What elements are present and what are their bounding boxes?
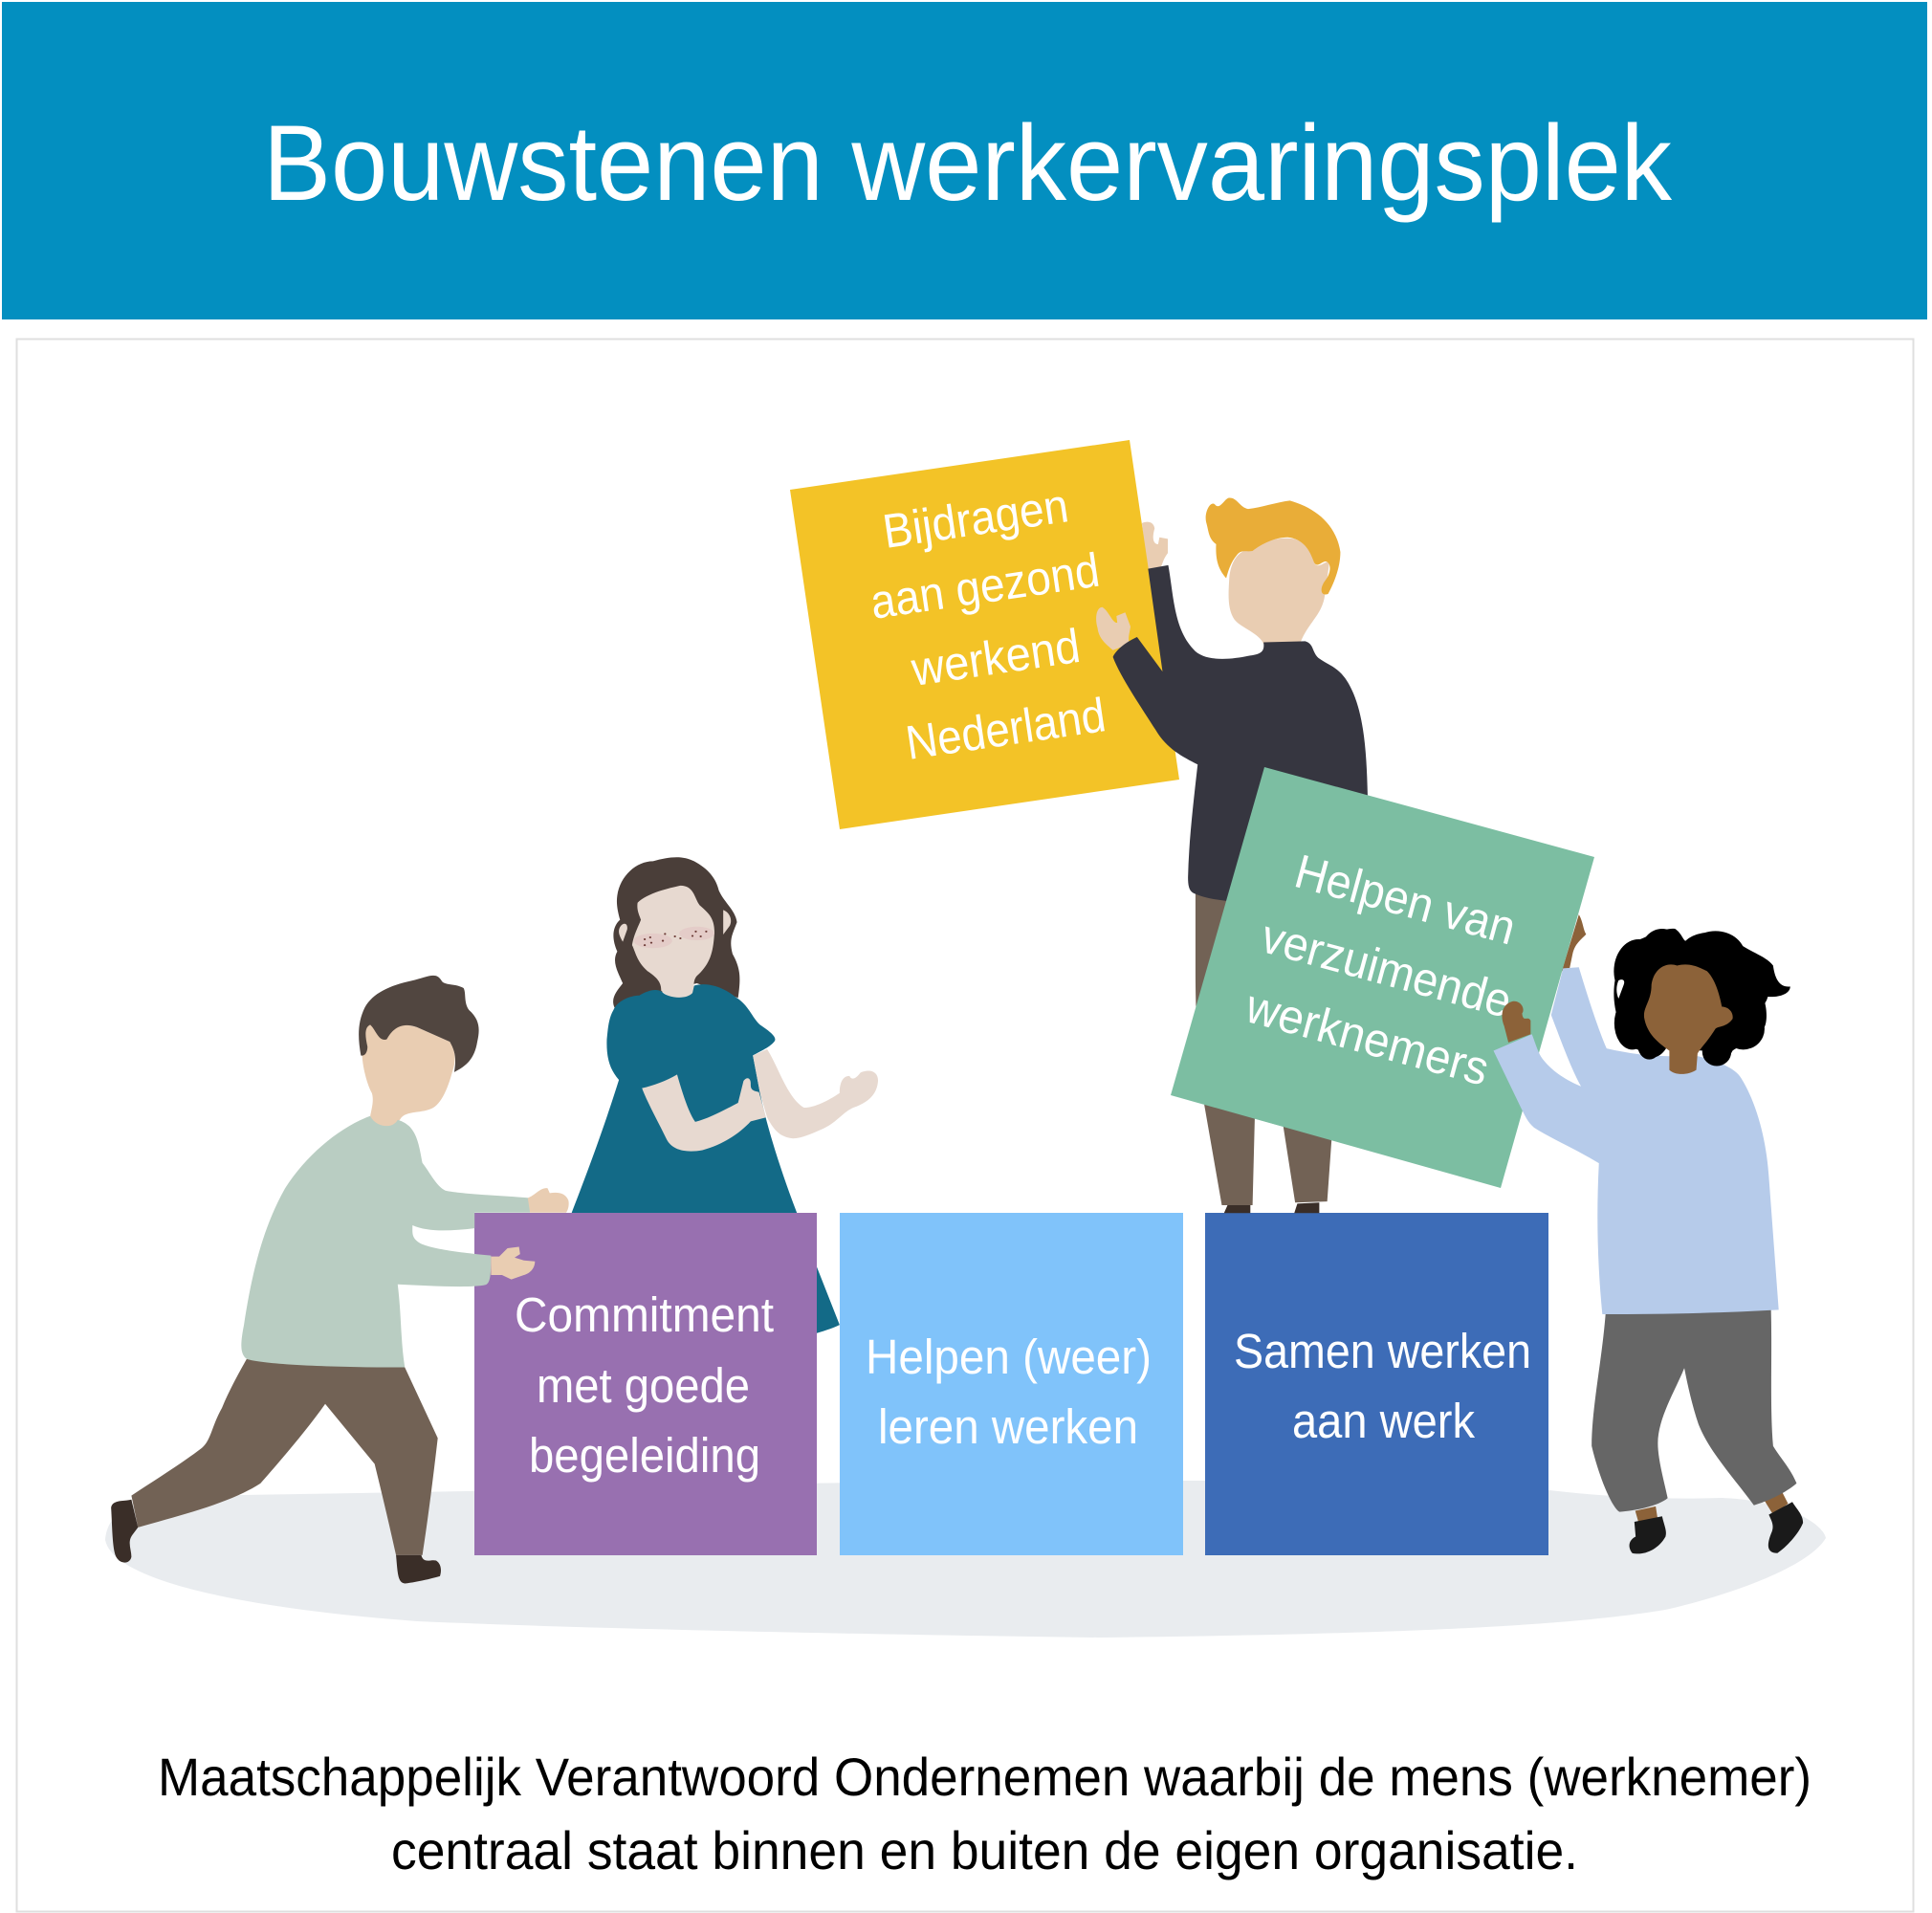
building block: dark blue: Samen werken [1234, 1324, 1531, 1378]
figure: man pushing block [111, 976, 569, 1584]
building block: purple: met goede [537, 1358, 750, 1413]
building block: dark blue [1205, 1213, 1548, 1555]
sign: green [1171, 767, 1594, 1188]
sign: yellow: Nederland [903, 688, 1109, 770]
header banner [2, 2, 1927, 319]
sign: yellow: werkend [908, 619, 1084, 696]
building block: light blue: leren werken [878, 1399, 1138, 1454]
hand of right figure behind sign [1562, 914, 1586, 971]
building block: light blue [840, 1213, 1183, 1555]
caption text: centraal staat binnen en buiten de eigen organisatie. [391, 1820, 1578, 1880]
caption text: Maatschappelijk Verantwoord Ondernemen waarbij de mens (werknemer) [158, 1747, 1811, 1807]
caption text [158, 1747, 1811, 1880]
ground shape [105, 1481, 1826, 1638]
title: Bouwstenen werkervaringsplek [263, 103, 1673, 223]
figure: person with curly black hair [1493, 929, 1803, 1553]
building block: purple: Commitment [515, 1287, 774, 1342]
building block: purple: begeleiding [529, 1428, 760, 1483]
sign: yellow: Bijdragen [880, 478, 1072, 559]
building block: purple [474, 1213, 817, 1555]
building block: dark blue: aan werk [1292, 1394, 1475, 1448]
figure: man with blond hair, upper body [1096, 498, 1368, 901]
sign: green: Helpen van [1289, 845, 1522, 955]
sign: green: verzuimende [1256, 910, 1517, 1028]
figure: woman with curly hair [572, 857, 878, 1334]
sign: green: werknemers [1240, 978, 1495, 1096]
figure: man behind signs, lower body [1142, 522, 1336, 1213]
sign: yellow [790, 440, 1179, 829]
building block: light blue: Helpen (weer) [866, 1330, 1152, 1384]
sign: yellow: aan gezond [867, 543, 1103, 629]
